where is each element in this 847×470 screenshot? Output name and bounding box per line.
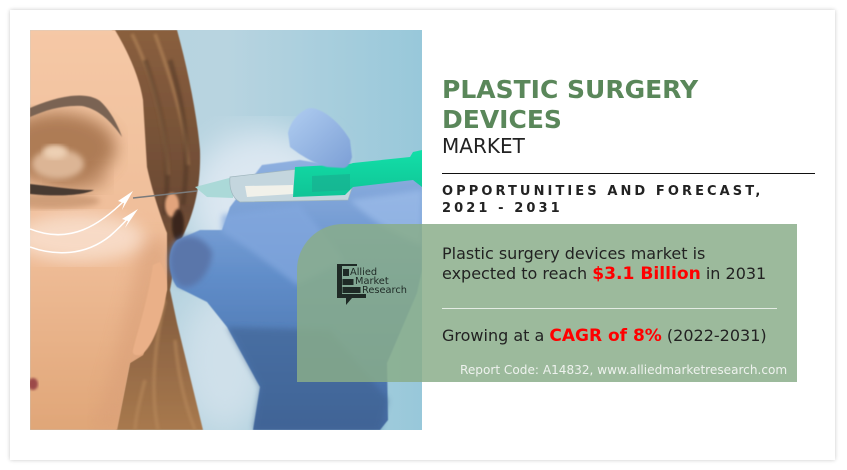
market size text xyxy=(442,244,766,284)
logo: Market xyxy=(355,276,389,287)
logo mark xyxy=(337,264,366,305)
forecast heading xyxy=(442,184,763,216)
eyelashes xyxy=(30,184,94,195)
title: PLASTIC SURGERY xyxy=(442,75,698,104)
forecast heading: 2021 - 2031 xyxy=(442,201,563,216)
fingertip xyxy=(169,236,212,287)
lip xyxy=(28,378,38,390)
lift arrows xyxy=(30,191,138,253)
logo text xyxy=(350,267,407,296)
subtitle: MARKET xyxy=(442,134,525,158)
CAGR text: Growing at a CAGR of 8% (2022-2031) xyxy=(442,326,767,346)
info panel xyxy=(297,224,797,382)
jaw shading xyxy=(101,238,166,430)
eye shadow xyxy=(0,112,116,184)
logo: Research xyxy=(362,285,407,296)
photo: injection at the temple xyxy=(30,30,422,430)
thumb xyxy=(288,108,352,168)
panel divider xyxy=(442,308,777,309)
market size text: Plastic surgery devices market is xyxy=(442,244,705,263)
logo: Allied xyxy=(350,267,377,278)
index finger highlight xyxy=(218,211,318,285)
title: DEVICES xyxy=(442,105,562,134)
hair xyxy=(112,30,203,430)
report code: Report Code: A14832, www.alliedmarketresearch.com xyxy=(460,363,787,377)
ear xyxy=(133,262,167,355)
logo xyxy=(337,264,407,305)
eyebrow xyxy=(30,95,122,137)
skin xyxy=(30,30,167,430)
rule xyxy=(442,173,815,174)
syringe xyxy=(133,150,422,202)
title xyxy=(442,75,698,134)
glove hand xyxy=(169,160,422,430)
forecast heading: OPPORTUNITIES AND FORECAST, xyxy=(442,184,763,199)
market size text: expected to reach $3.1 Billion in 2031 xyxy=(442,264,766,284)
